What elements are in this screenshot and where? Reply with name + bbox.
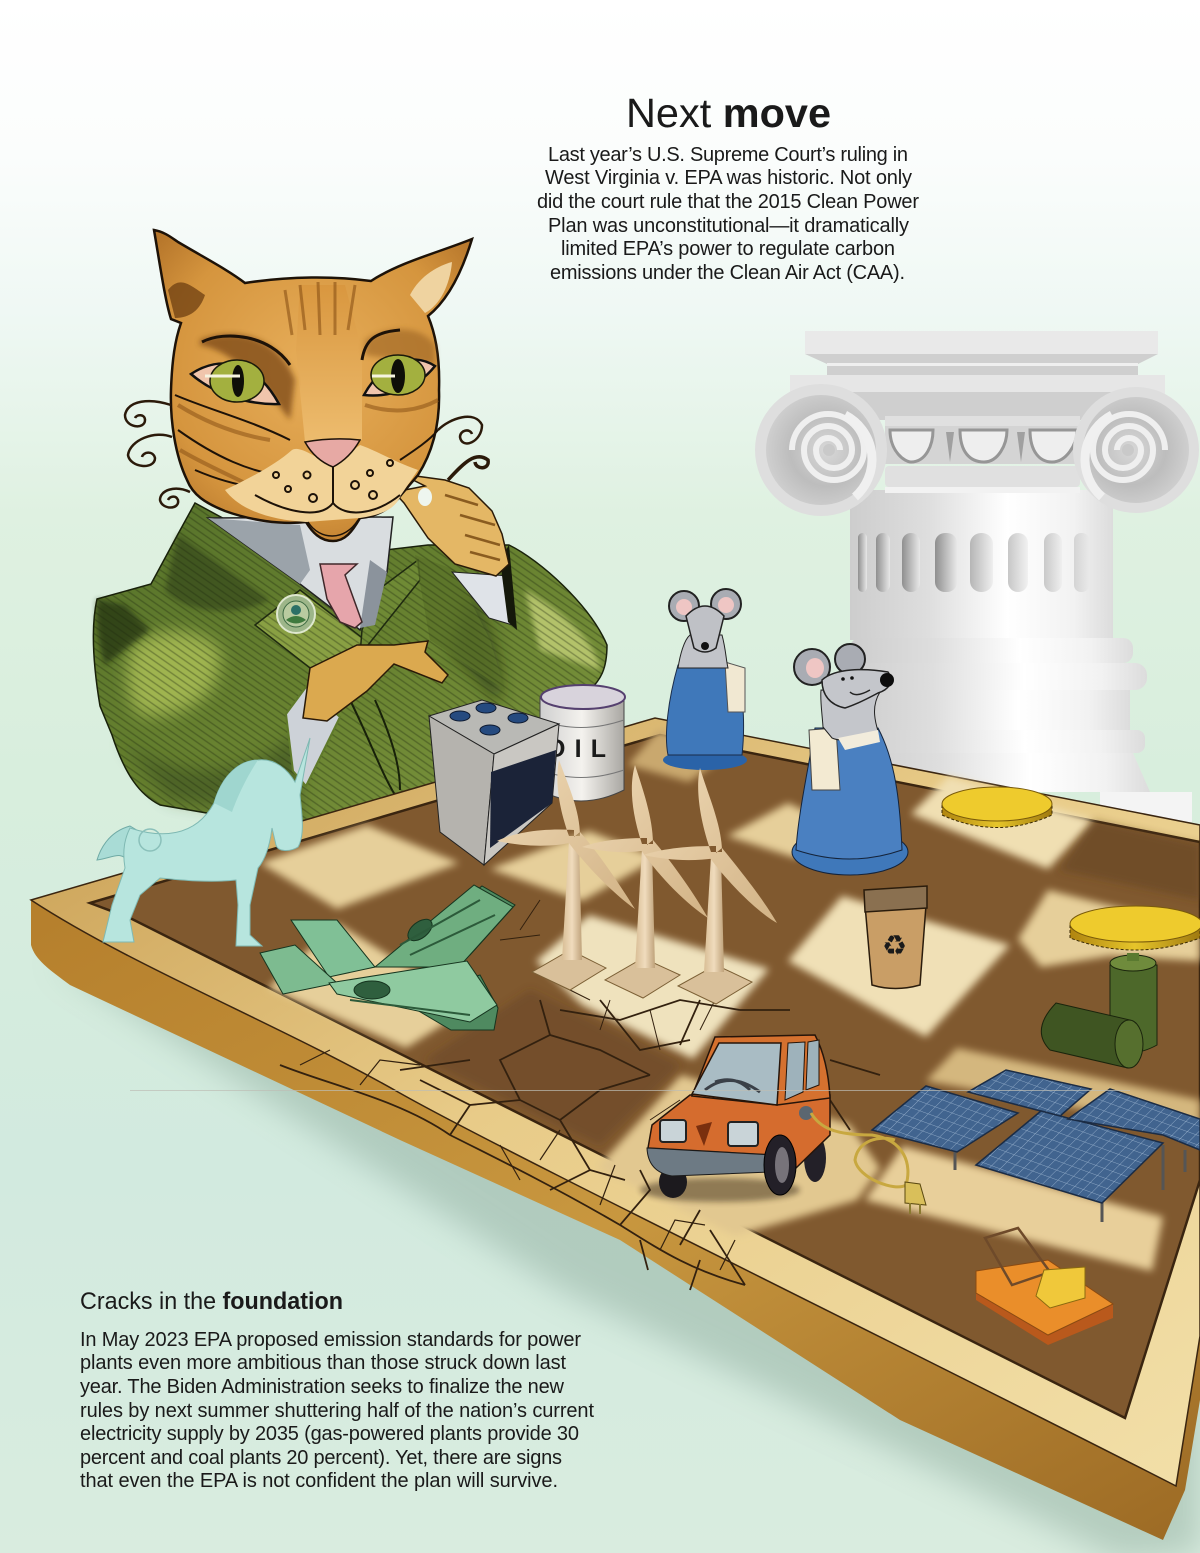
- charging cable and plug: [811, 1113, 926, 1214]
- intro text block: West Virginia v. EPA was historic. Not only: [545, 167, 912, 189]
- intro text block: Last year’s U.S. Supreme Court’s ruling in: [548, 144, 908, 166]
- unicorn figurine: [97, 738, 310, 946]
- darker squares: [425, 820, 1200, 1145]
- batteries: [1041, 953, 1157, 1068]
- wind turbines: [497, 760, 777, 1004]
- cat muzzle: [225, 445, 418, 522]
- left eye: [191, 360, 279, 404]
- heading: Next move: Next move: [626, 90, 831, 136]
- mouse figure with overalls, back: [663, 589, 747, 770]
- turbine one: [497, 760, 635, 990]
- shirt collar: [208, 517, 393, 630]
- gold coins: [942, 787, 1200, 950]
- intro text block: limited EPA’s power to regulate carbon: [561, 238, 895, 260]
- egg and dart band: [885, 426, 1080, 493]
- pointing paw: [303, 641, 448, 721]
- ionic column: [755, 331, 1199, 822]
- cat nose: [305, 439, 360, 467]
- left volute: [755, 384, 887, 516]
- lower cuff: [286, 687, 340, 786]
- oil barrel: [540, 685, 625, 801]
- subheading: Cracks in the foundation: Cracks in the foundation: [80, 1288, 343, 1315]
- oil barrel: OIL: [546, 735, 606, 763]
- body text block: rules by next summer shuttering half of the nation’s current: [80, 1400, 594, 1422]
- recycling bin: [864, 886, 927, 988]
- intro text block: [537, 144, 919, 284]
- body text block: percent and coal plants 20 percent). Yet, there are signs: [80, 1447, 562, 1469]
- body text block: electricity supply by 2035 (gas-powered plants provide 30: [80, 1423, 579, 1445]
- body text block: In May 2023 EPA proposed emission standards for power: [80, 1329, 581, 1351]
- raised cuff: [452, 572, 516, 626]
- board frame: [31, 718, 1200, 1486]
- turbine three: [643, 768, 777, 1004]
- body text block: year. The Biden Administration seeks to finalize the new: [80, 1376, 565, 1398]
- stove: [429, 700, 559, 865]
- body text block: plants even more ambitious than those struck down last: [80, 1352, 566, 1374]
- board inner field: [90, 735, 1200, 1418]
- raised paw pinching whisker: [394, 474, 509, 576]
- cat mouth and whisker dots: [255, 460, 400, 536]
- EPA lapel badge: [277, 595, 315, 633]
- pink tie: [320, 564, 362, 628]
- solar panels: [872, 1070, 1200, 1222]
- dollar bills: [260, 885, 515, 1030]
- light checker squares: [260, 730, 1200, 1271]
- recycling bin: ♻: [882, 929, 907, 962]
- mouse figure with overalls, front: [792, 644, 908, 875]
- mouse trap with cheese: [976, 1228, 1113, 1345]
- board side: [31, 900, 1200, 1540]
- faint horizontal rule: [130, 1090, 1130, 1091]
- chessboard shadow: [50, 960, 1200, 1553]
- column flutes: [858, 533, 1089, 592]
- intro text block: emissions under the Clean Air Act (CAA).: [550, 262, 905, 284]
- turbine two: [582, 765, 708, 998]
- intro text block: Plan was unconstitutional—it dramatically: [548, 215, 909, 237]
- cracks in the foundation: [280, 900, 880, 1290]
- body text block: that even the EPA is not confident the plan will survive.: [80, 1470, 558, 1492]
- right eye: [364, 355, 435, 395]
- cat ears and head: [154, 230, 472, 541]
- cat in green EPA suit: [93, 230, 607, 830]
- electric car: [640, 1035, 926, 1214]
- curly whiskers: [125, 401, 488, 508]
- intro text block: did the court rule that the 2015 Clean Power: [537, 191, 919, 213]
- right volute: [1073, 387, 1199, 513]
- suit jacket: [93, 503, 607, 830]
- body text block: [80, 1329, 594, 1492]
- chessboard: [31, 718, 1200, 1540]
